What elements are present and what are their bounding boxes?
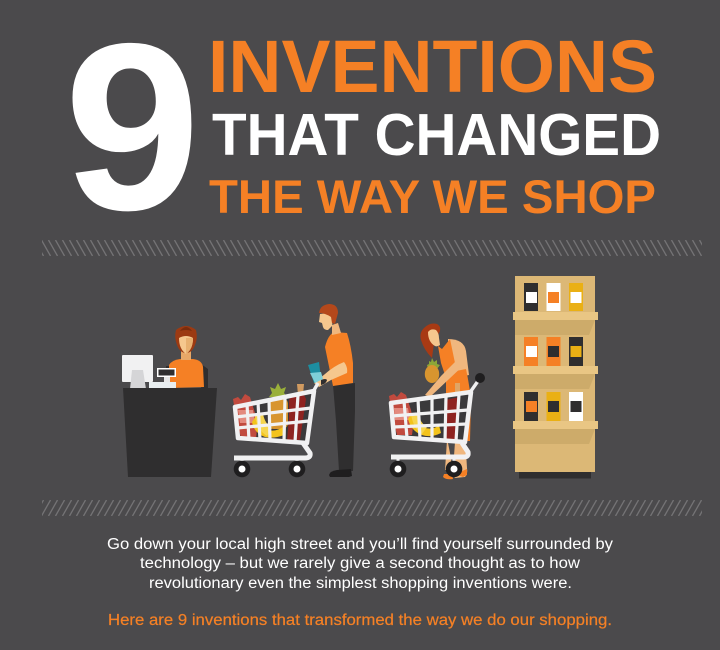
icon: woman [420,324,471,479]
illustration: woman with trolley [389,324,485,479]
icon: monitor [122,355,153,389]
intro text: Go down your local high street and you’ll find yourself surrounded by [107,536,613,553]
illustration: cashier at checkout [122,326,217,477]
title line: that changed: THAT CHANGED [212,102,661,168]
intro text: technology – but we rarely give a second thought as to how [140,555,581,572]
products: top row [524,283,583,311]
illustration: product shelves [513,276,598,478]
products: middle row [524,337,583,366]
checkout counter [123,388,217,477]
icon: man [308,304,355,477]
icon: card reader and till [149,368,176,389]
trolley handle ball [475,373,485,383]
trolley frame [392,394,468,441]
big number 9: 9 [64,0,200,260]
icon: cashier [166,326,208,388]
title [64,0,661,260]
orange callout text: Here are 9 inventions that transformed the way we do our shopping. [108,612,612,629]
icon: trolley 1 [233,383,318,477]
trolley frame [236,395,311,442]
illustration: man with trolley [233,304,355,477]
trolley contents [389,392,471,442]
products: bottom row [524,392,583,421]
trolley wheels [234,461,305,477]
trolley contents [233,383,313,443]
trolley wheels [390,461,462,477]
intro text: revolutionary even the simplest shopping inventions were. [149,575,572,592]
title line: inventions: INVENTIONS [208,25,657,108]
intro text [107,536,613,592]
title line: the way we shop: THE WAY WE SHOP [209,170,656,223]
icon: trolley 2 [389,373,485,477]
